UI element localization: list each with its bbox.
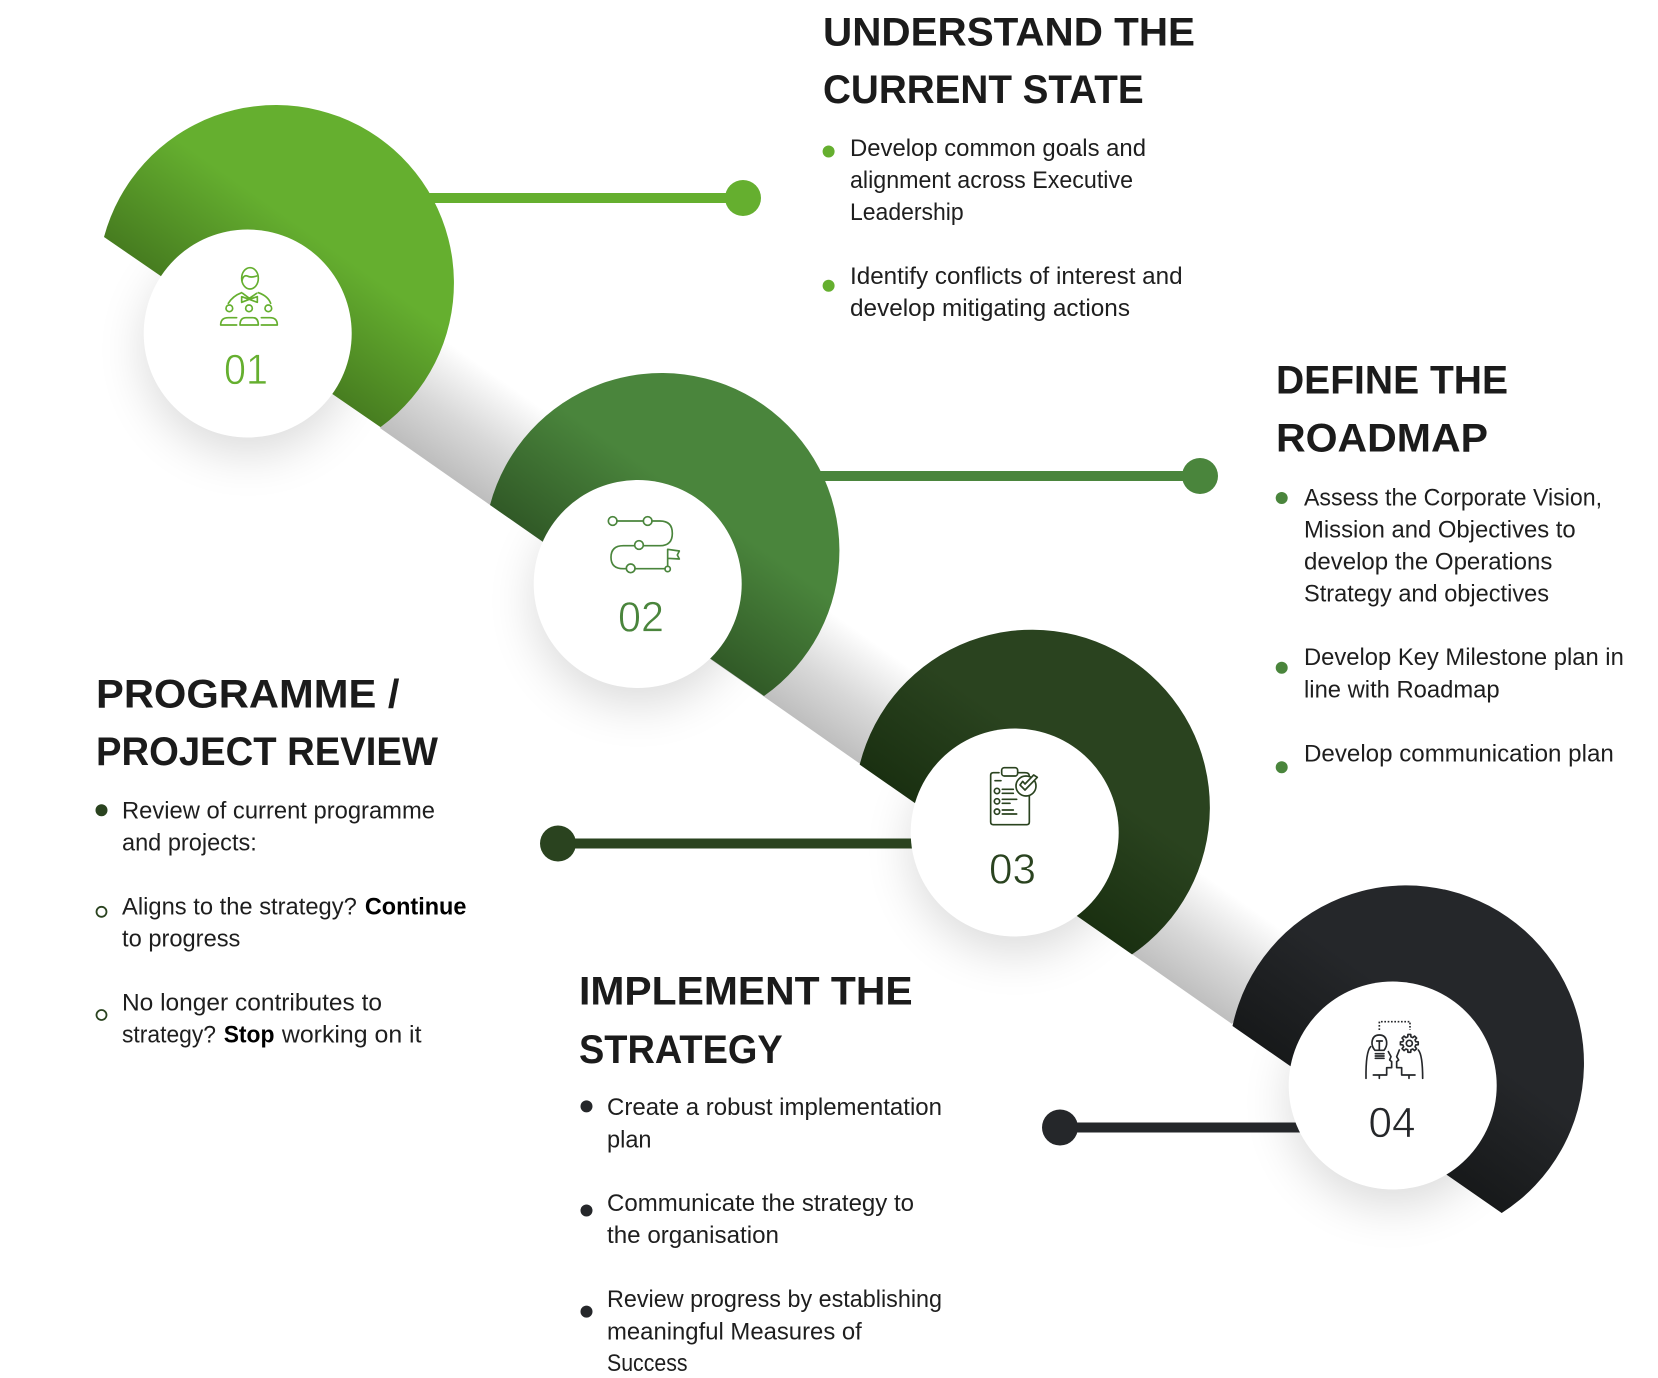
donut 01 <box>104 105 454 427</box>
bullet item: conflicts of interest <box>823 263 1183 322</box>
heading: implement the strategy: IMPLEMENT THE <box>579 970 913 1014</box>
heading: understand the current state: CURRENT STATE <box>823 68 1144 112</box>
sub-bullet: stop <box>96 990 422 1049</box>
connector 03 <box>540 826 928 862</box>
bullet item: corporate vision: Assess the Corporate Vision, <box>1304 484 1602 511</box>
bullet item: common goals: Leadership <box>850 199 964 226</box>
heading: define the roadmap: ROADMAP <box>1276 417 1488 461</box>
sub-bullet: stop: Stop <box>224 1022 274 1049</box>
sub-bullet: continue: Aligns to the strategy? <box>122 893 357 920</box>
donut 03 <box>860 630 1210 954</box>
step 04 ring <box>1042 885 1584 1213</box>
heading: programme / project review <box>96 672 438 774</box>
bullet item: review: Review of current programme <box>122 798 435 825</box>
bullet item: measures of success: Review progress by establishing <box>607 1286 942 1313</box>
number 01: 01 <box>224 346 268 394</box>
bullet item: implementation plan: plan <box>607 1126 652 1153</box>
bullet item: common goals: Develop common goals and <box>850 135 1146 162</box>
bullet item: review <box>96 798 435 857</box>
bullet item: conflicts of interest: develop mitigating actions <box>850 295 1130 322</box>
inner circle 01 <box>144 230 352 438</box>
inner circle 04 <box>1289 982 1497 1190</box>
number 02: 02 <box>618 594 664 642</box>
bullet item: milestone plan <box>1276 644 1624 703</box>
icon: checklist clipboard <box>991 768 1037 825</box>
bullet item: common goals <box>823 135 1146 226</box>
bullet item: communicate <box>580 1190 914 1249</box>
bullet item: corporate vision <box>1276 484 1602 608</box>
bullet item: corporate vision: Mission and Objectives to <box>1304 516 1576 543</box>
heading: understand the current state <box>823 10 1195 112</box>
bullet item: milestone plan: line with Roadmap <box>1304 676 1500 703</box>
number 03: 03 <box>989 846 1036 894</box>
panel: define the roadmap <box>1276 358 1624 773</box>
connector 01 <box>425 180 761 216</box>
number 04: 04 <box>1368 1099 1416 1147</box>
sub-bullet: continue: to progress <box>122 926 240 952</box>
heading: understand the current state: UNDERSTAND THE <box>823 10 1195 54</box>
step 01 ring <box>104 105 761 454</box>
bullet item: implementation plan: Create a robust implementation <box>607 1094 942 1121</box>
heading: programme / project review: PROGRAMME / <box>96 672 400 716</box>
icon: leader with team <box>221 268 277 325</box>
panel: understand the current state <box>823 10 1195 322</box>
heading: define the roadmap <box>1276 358 1508 461</box>
sub-bullet: continue: Continue <box>365 893 466 920</box>
donut 04 <box>1232 885 1584 1213</box>
bullet item: corporate vision: develop the Operations <box>1304 548 1552 575</box>
bullet item: communication plan: Develop communication plan <box>1304 740 1614 768</box>
connector 04 <box>1042 1110 1310 1146</box>
inner circle 03 <box>911 728 1119 936</box>
step 02 ring <box>490 373 1218 705</box>
icon: two heads with bulb and gear <box>1366 1022 1423 1078</box>
bullet item: communicate: the organisation <box>607 1222 779 1249</box>
bullet item: measures of success: meaningful Measures of <box>607 1318 862 1345</box>
panel: implement the strategy <box>579 970 942 1377</box>
sub-bullet: stop: strategy? <box>122 1022 216 1049</box>
bullet item: measures of success: Success <box>607 1350 688 1377</box>
connector 02 <box>810 458 1218 494</box>
bullet item: common goals: alignment across Executive <box>850 167 1133 194</box>
inner circle 02 <box>534 480 742 688</box>
bullet item: conflicts of interest: Identify conflicts of interest and <box>850 263 1183 290</box>
bullet item: implementation plan <box>580 1094 942 1153</box>
icon: winding roadmap <box>608 517 679 573</box>
bullet item: corporate vision: Strategy and objectives <box>1304 580 1549 608</box>
bullet item: milestone plan: Develop Key Milestone plan in <box>1304 644 1624 671</box>
sub-bullet: stop: working on it <box>281 1022 422 1049</box>
heading: programme / project review: PROJECT REVIEW <box>96 730 438 774</box>
bullet item: measures of success <box>580 1286 942 1377</box>
heading: define the roadmap: DEFINE THE <box>1276 358 1508 402</box>
heading: implement the strategy <box>579 970 913 1072</box>
sub-bullet: continue <box>96 893 466 952</box>
bullet item: communicate: Communicate the strategy to <box>607 1190 914 1217</box>
sub-bullet: stop: No longer contributes to <box>122 990 382 1017</box>
bullet item: review: and projects: <box>122 830 257 857</box>
diagonal shadow band <box>380 334 1298 1024</box>
heading: implement the strategy: STRATEGY <box>579 1028 783 1072</box>
step 03 ring <box>540 630 1210 954</box>
panel: programme / project review <box>96 672 466 1049</box>
donut 02 <box>490 373 839 696</box>
